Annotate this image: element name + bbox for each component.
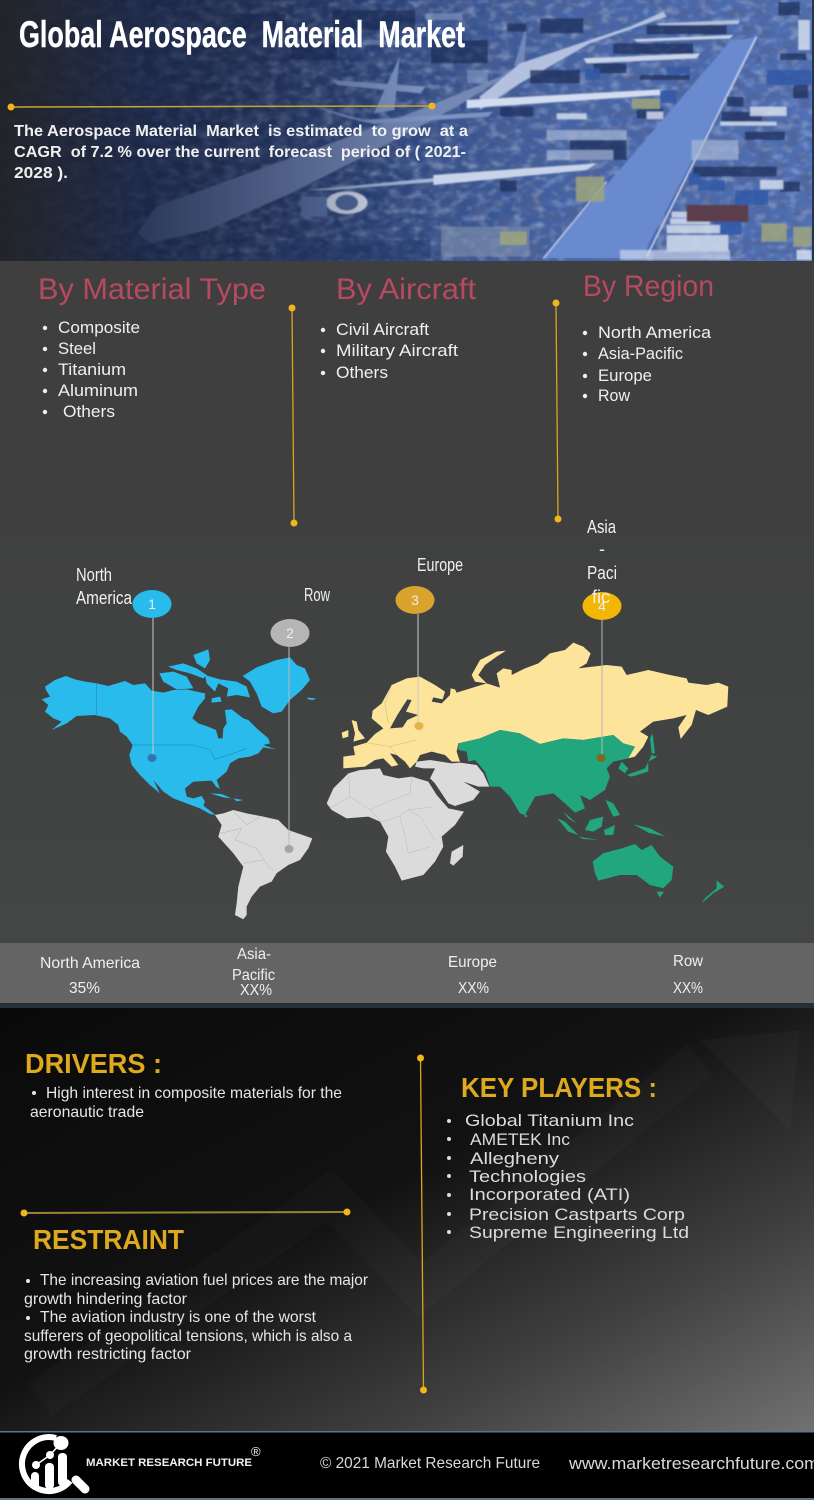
share: North America — [40, 955, 140, 997]
share: North America: North America — [40, 955, 140, 972]
share: North America: 35% — [69, 980, 100, 997]
pin 3: Europe: 3 — [411, 592, 419, 608]
list: key players: AMETEK Inc — [470, 1131, 570, 1149]
heading: by region: By Region — [583, 270, 714, 303]
panel: world map background — [0, 533, 814, 943]
logo wordmark: MARKET RESEARCH FUTURE — [86, 1457, 252, 1469]
region: Africa and Middle East — [327, 760, 489, 881]
map label: Asia-Pacific: Paci — [587, 563, 617, 583]
share: Europe: XX% — [458, 980, 489, 997]
hero summary text: CAGR of 7.2 % over the current forecast period of ( 2021- — [14, 144, 466, 161]
column: by material type — [38, 273, 266, 421]
list: key players: Technologies — [469, 1168, 586, 1186]
pin 4: Asia-Pacific: 4 — [598, 598, 606, 614]
list: material types — [43, 318, 140, 421]
list: regions: Asia-Pacific — [598, 344, 683, 363]
list: key players: Allegheny — [470, 1150, 560, 1168]
share: Row: XX% — [673, 980, 703, 997]
list: aircraft types: Military Aircraft — [336, 341, 458, 360]
list: material types: Others — [63, 402, 115, 421]
pin 1: North America — [132, 590, 172, 762]
region: North America — [42, 649, 316, 815]
share: Asia-Pacific: Pacific — [232, 967, 275, 984]
copyright: © 2021 Market Research Future — [320, 1455, 540, 1472]
heading: by material type: By Material Type — [38, 273, 266, 306]
pin 4: Asia-Pacific — [582, 592, 622, 762]
pin 1: North America: 1 — [148, 596, 156, 612]
list: key players — [447, 1112, 689, 1242]
text: restraint list: growth restricting factor — [24, 1346, 192, 1363]
list: aircraft types: Civil Aircraft — [336, 320, 429, 339]
share: Europe: Europe — [448, 954, 497, 971]
divider: gold vertical line three — [417, 1054, 427, 1394]
map label: North America: North — [76, 565, 112, 585]
panel: segmentation — [0, 261, 814, 533]
region: Europe and Russia — [342, 643, 728, 768]
column: by region — [583, 270, 714, 405]
pin 2: Row — [270, 619, 310, 853]
share: Asia-Pacific: Asia- — [237, 946, 271, 963]
title: Global Aerospace Material Market — [19, 14, 465, 55]
list: key players: Global Titanium Inc — [465, 1112, 634, 1130]
hero summary text — [14, 123, 468, 182]
panel: footer — [0, 1431, 814, 1500]
text: restraint list: sufferers of geopolitical tensions, which is also a — [24, 1328, 352, 1345]
share: Europe — [448, 954, 497, 997]
map label: Asia-Pacific: - — [599, 539, 605, 559]
map label: Row: Row — [304, 585, 331, 605]
heading: restraint: RESTRAINT — [33, 1224, 184, 1255]
divider: gold vertical line two — [552, 300, 562, 522]
divider: hero gold line — [8, 102, 436, 110]
pin 2: Row: 2 — [286, 625, 294, 641]
column: by aircraft — [321, 273, 477, 382]
panel: regional share strip — [0, 943, 814, 1008]
list: aircraft types — [321, 320, 458, 382]
website: www.marketresearchfuture.com — [568, 1454, 814, 1473]
map label: Europe: Europe — [417, 555, 463, 575]
text: restraint list: growth hindering factor — [24, 1291, 188, 1308]
share: Row — [673, 953, 703, 997]
share: Asia-Pacific — [232, 946, 275, 999]
list: key players: Incorporated (ATI) — [469, 1186, 630, 1204]
world map — [42, 643, 728, 919]
text: drivers list: aeronautic trade — [30, 1104, 144, 1121]
map label: North America — [76, 565, 133, 608]
list: aircraft types: Others — [336, 363, 388, 382]
map label: Asia-Pacific: Asia — [587, 517, 617, 537]
list: material types: Composite — [58, 318, 140, 337]
list: regions: Row — [598, 386, 631, 405]
map label: North America: America — [76, 588, 133, 608]
region: South America — [215, 810, 312, 919]
share: Row: Row — [673, 953, 703, 970]
heading: key players: KEY PLAYERS : — [461, 1072, 657, 1103]
region: Asia-Pacific — [458, 730, 724, 903]
list: key players: Precision Castparts Corp — [469, 1206, 685, 1224]
share: Asia-Pacific: XX% — [240, 982, 272, 999]
map label: Asia-Pacific: fic — [592, 587, 610, 607]
list: material types: Titanium — [58, 360, 126, 379]
list: regions: Europe — [598, 366, 652, 385]
list: material types: Steel — [58, 339, 96, 358]
text: drivers list: High interest in composite materials for the — [46, 1085, 342, 1102]
divider: gold vertical line one — [288, 304, 298, 526]
list: key players: Supreme Engineering Ltd — [469, 1224, 689, 1242]
panel: drivers, restraint and key players — [0, 1008, 814, 1431]
panel: hero photograph of aircraft assembly line — [0, 0, 814, 261]
map label: Asia-Pacific — [587, 517, 617, 607]
heading: drivers: DRIVERS : — [25, 1048, 162, 1079]
list: regions: North America — [598, 323, 712, 342]
heading: by aircraft: By Aircraft — [336, 273, 477, 306]
text: restraint list: The increasing aviation fuel prices are the major — [40, 1272, 369, 1289]
list: regions — [583, 323, 712, 405]
icon: Market Research Future logo — [22, 1436, 85, 1491]
divider: gold horizontal line — [20, 1208, 350, 1216]
text: restraint list: The aviation industry is one of the worst — [40, 1309, 317, 1326]
hero summary text: 2028 ). — [14, 165, 68, 182]
text: drivers list — [30, 1085, 342, 1121]
pin 3: Europe — [396, 586, 434, 730]
text: restraint list — [24, 1272, 369, 1363]
registered mark: ® — [251, 1444, 261, 1459]
list: material types: Aluminum — [58, 381, 138, 400]
hero summary text: The Aerospace Material Market is estimated to grow at a — [14, 123, 468, 140]
